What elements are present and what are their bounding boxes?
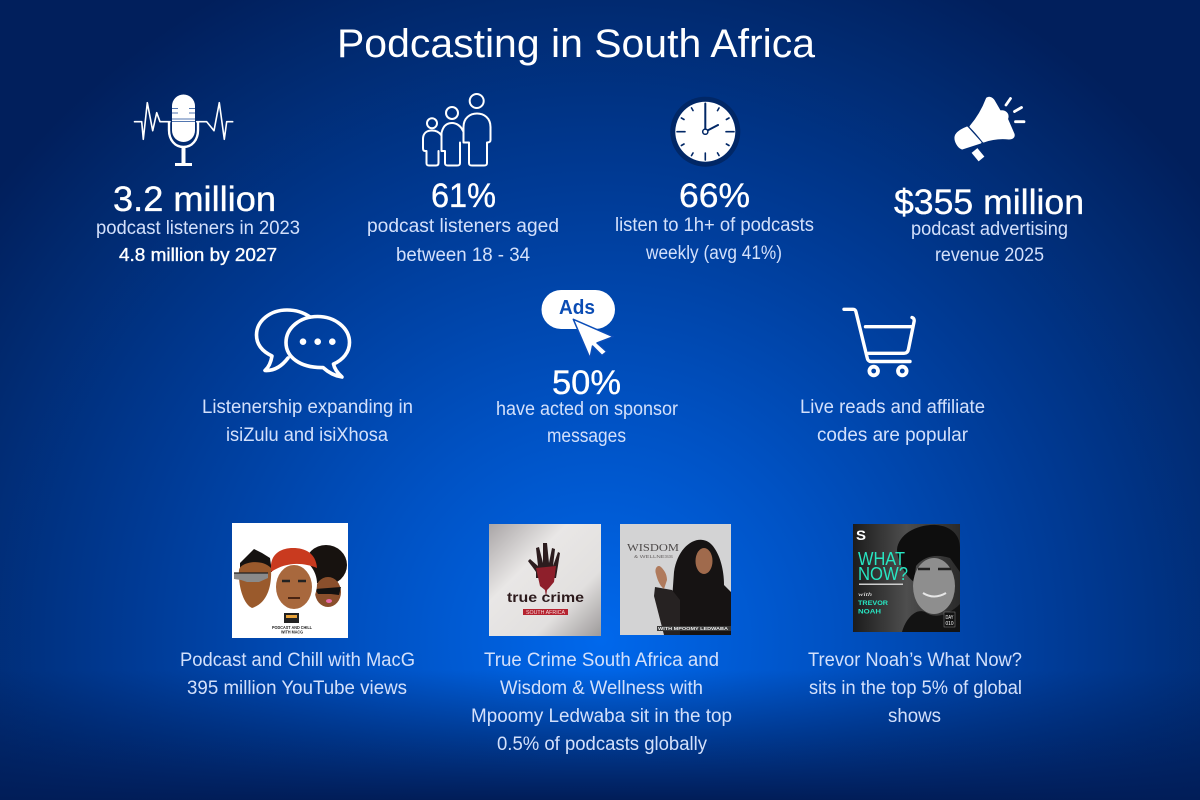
text: listenership expanding: Listenership expanding in <box>202 397 413 418</box>
text: messages: messages <box>547 426 626 447</box>
text: podcast listeners aged: podcast listeners aged <box>367 216 559 237</box>
icon: microphone with waveform <box>134 94 233 166</box>
text: Mpoomy Ledwaba sit in the top: Mpoomy Ledwaba sit in the top <box>471 706 732 727</box>
cover: What Now with Trevor Noah: NOW? <box>858 564 908 584</box>
stat: 66%: 66% <box>679 177 750 215</box>
text: Podcast and Chill with MacG: Podcast and Chill with MacG <box>180 650 415 671</box>
text: listeners in 2023: podcast listeners in 2023 <box>96 218 300 239</box>
cover: Wisdom & Wellness <box>620 524 731 635</box>
cover: What Now with Trevor Noah: WHAT <box>858 549 905 569</box>
cover: Wisdom & Wellness: WITH MPOOMY LEDWABA <box>658 626 729 631</box>
cover: Podcast and Chill with MacG: PODCAST AND CHILL <box>272 625 312 630</box>
panel: listeners <box>96 94 300 265</box>
text: 4.8 million by 2027: 4.8 million by 2027 <box>119 245 277 265</box>
text: isiZulu and isiXhosa: isiZulu and isiXhosa <box>226 425 388 446</box>
text: 395 million YouTube views: 395 million YouTube views <box>187 678 407 699</box>
text: have acted on sponsor: have acted on sponsor <box>496 399 679 420</box>
text: shows: shows <box>888 706 941 727</box>
text: podcast advertising: podcast advertising <box>911 219 1068 240</box>
icon: speech bubbles <box>256 310 350 377</box>
cover: What Now with Trevor Noah: NOAH <box>858 608 881 616</box>
stat: 61%: 61% <box>431 177 496 215</box>
icon: megaphone <box>955 98 1024 159</box>
stat: 50%: 50% <box>552 364 621 402</box>
cover: What Now with Trevor Noah: 010 <box>946 621 954 627</box>
cover: What Now with Trevor Noah: with <box>858 592 872 598</box>
cover: Podcast and Chill with MacG <box>232 523 348 638</box>
cover: True Crime South Africa: SOUTH AFRICA <box>526 610 566 616</box>
cover: What Now with Trevor Noah: DAY <box>946 615 954 621</box>
panel: Podcast and Chill <box>180 523 415 699</box>
text: weekly (avg 41%): weekly (avg 41%) <box>645 243 782 264</box>
title: Podcasting in South Africa <box>337 22 816 66</box>
text: revenue 2025: revenue 2025 <box>935 245 1044 266</box>
text: Wisdom & Wellness with: Wisdom & Wellness with <box>500 678 703 699</box>
panel: live reads <box>800 309 985 446</box>
text: 0.5% of podcasts globally: 0.5% of podcasts globally <box>497 734 707 755</box>
cover: True Crime South Africa <box>489 524 601 636</box>
cover: What Now with Trevor Noah: S <box>856 527 866 543</box>
panel: weekly listening <box>615 97 814 264</box>
panel: sponsor messages <box>496 290 679 447</box>
cover: Podcast and Chill with MacG: WITH MACG <box>281 630 303 634</box>
panel: advertising revenue <box>894 98 1084 266</box>
icon: ads click: Ads <box>559 297 595 319</box>
icon: family <box>423 94 490 166</box>
cover: What Now with Trevor Noah <box>853 524 960 632</box>
cover: True Crime South Africa: true crime <box>507 589 584 605</box>
cover: What Now with Trevor Noah: TREVOR <box>858 600 888 607</box>
panel: What Now <box>808 524 1022 727</box>
text: Trevor Noah's What Now?: Trevor Noah’s What Now? <box>808 650 1022 671</box>
text: True Crime South Africa and: True Crime South Africa and <box>484 650 719 671</box>
text: sits in the top 5% of global: sits in the top 5% of global <box>809 678 1022 699</box>
text: codes are popular: codes are popular <box>817 425 969 446</box>
panel: languages <box>202 310 413 446</box>
cover: Wisdom & Wellness: & WELLNESS <box>634 554 673 559</box>
panel: top 0.5% podcasts <box>471 524 732 755</box>
text: listen to 1h+ of podcasts: listen to 1h+ of podcasts <box>615 215 814 236</box>
cover: Wisdom & Wellness: WISDOM <box>627 542 679 554</box>
icon: ads click <box>542 290 615 358</box>
stat: 3.2 million: 3.2 million <box>113 180 276 219</box>
panel: age group <box>367 94 559 266</box>
text: between 18 - 34: between 18 - 34 <box>396 245 530 266</box>
stat: $355 million: $355 million <box>894 183 1084 222</box>
text: live reads and affiliate: Live reads and affiliate <box>800 397 985 418</box>
icon: clock <box>670 97 740 167</box>
icon: shopping cart <box>844 309 914 375</box>
